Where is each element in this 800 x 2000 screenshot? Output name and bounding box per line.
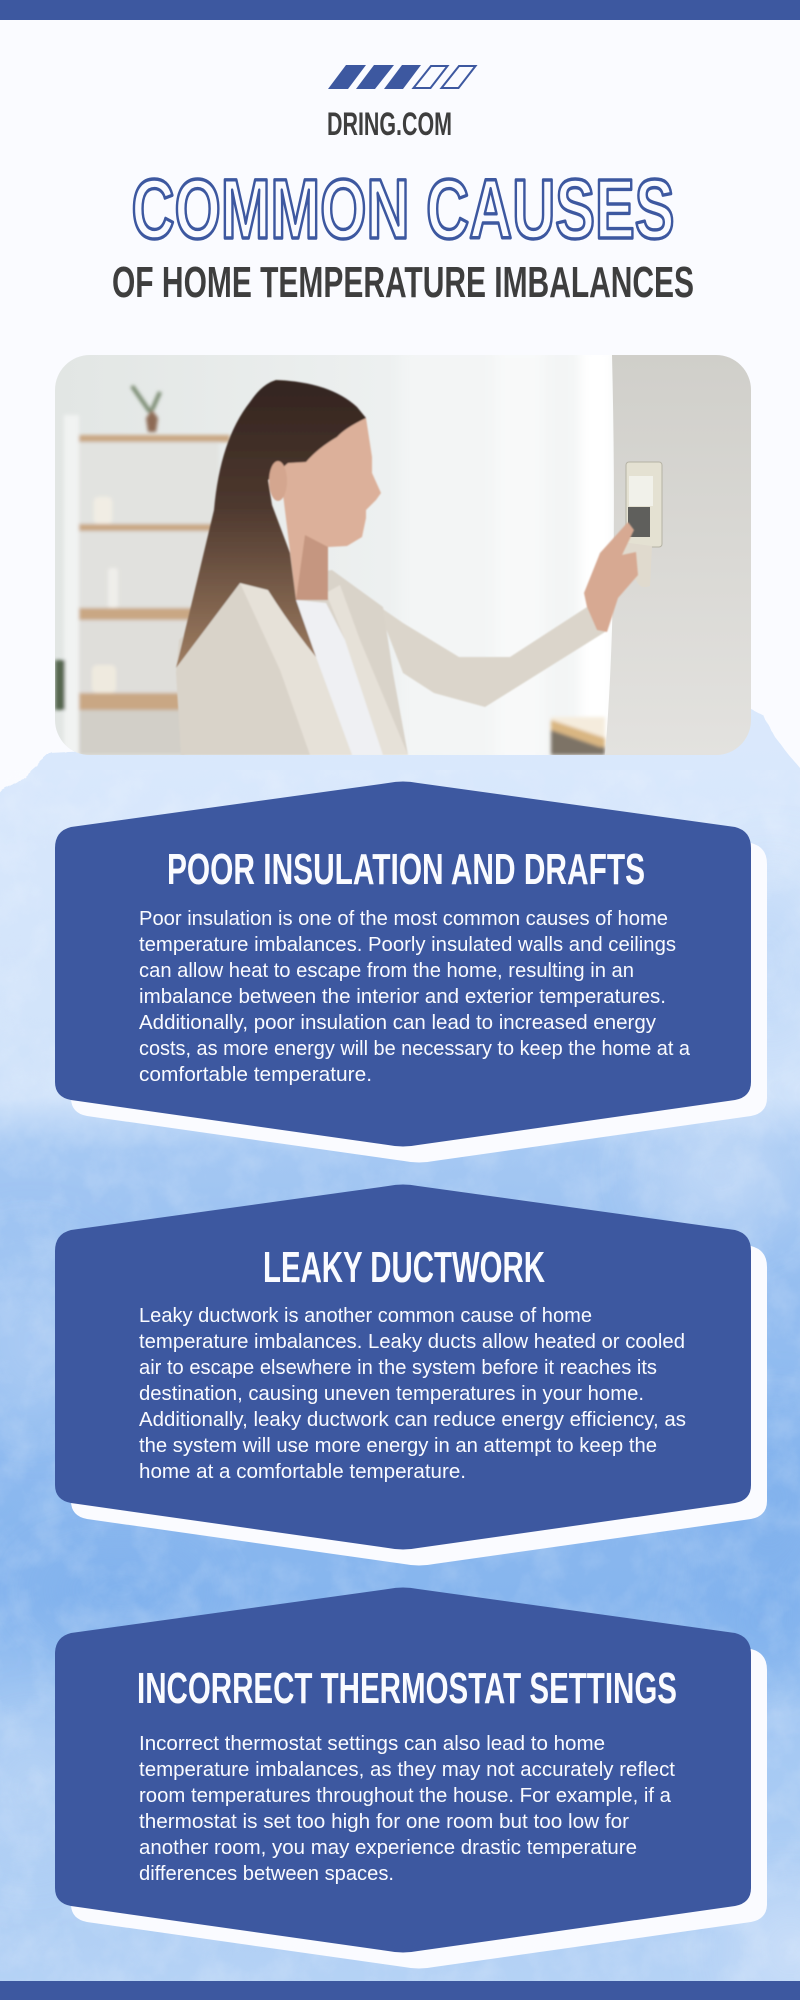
body text: [139, 1304, 686, 1483]
body text: home at a comfortable temperature.: [139, 1460, 466, 1483]
body text: another room, you may experience drastic temperature: [139, 1836, 637, 1859]
panel: leaky ductwork: [55, 1184, 767, 1566]
body text: can allow heat to escape from the home, resulting in an: [139, 959, 634, 982]
body text: costs, as more energy will be necessary to keep the home at a: [139, 1037, 691, 1060]
photo: woman adjusting thermostat: [55, 345, 751, 765]
body text: Additionally, leaky ductwork can reduce energy efficiency, as: [139, 1408, 686, 1431]
body text: Additionally, poor insulation can lead to increased energy: [139, 1011, 657, 1034]
body text: Poor insulation is one of the most common causes of home: [139, 907, 668, 930]
neck and face: [280, 418, 381, 600]
cardigan body: [176, 570, 408, 755]
logo text: DRING.COM: [327, 106, 452, 142]
body text: temperature imbalances. Poorly insulated walls and ceilings: [139, 933, 676, 956]
panel body: [55, 1588, 751, 1952]
thermostat: [626, 462, 662, 586]
body text: Leaky ductwork is another common cause of home: [139, 1304, 592, 1327]
panel: incorrect thermostat settings: [55, 1588, 767, 1968]
logo icon: slanted bars: [328, 65, 476, 89]
panel body: [55, 782, 751, 1146]
panel shadow: [71, 1604, 767, 1968]
lapel left: [240, 573, 352, 755]
heading: LEAKY DUCTWORK: [263, 1243, 545, 1292]
watercolor background: [0, 706, 800, 2000]
body text: destination, causing uneven temperatures in your home.: [139, 1382, 644, 1405]
top bar: [0, 0, 800, 20]
body text: Incorrect thermostat settings can also lead to home: [139, 1732, 605, 1755]
body text: [139, 907, 691, 1086]
hair: [176, 380, 366, 668]
bottom bar: [0, 1981, 800, 2000]
shirt: [296, 600, 383, 755]
body text: [139, 1732, 675, 1885]
panel body: [55, 1184, 751, 1550]
hand: [584, 522, 638, 632]
arm: [377, 605, 605, 707]
body text: differences between spaces.: [139, 1862, 394, 1885]
body text: temperature imbalances. Leaky ducts allow heated or cooled: [139, 1330, 685, 1353]
body text: comfortable temperature.: [139, 1063, 372, 1086]
body text: air to escape elsewhere in the system before it reaches its: [139, 1356, 657, 1379]
body text: room temperatures throughout the house. For example, if a: [139, 1784, 672, 1807]
panel shadow: [71, 798, 767, 1162]
panel shadow: [71, 1200, 767, 1566]
body text: temperature imbalances, as they may not accurately reflect: [139, 1758, 675, 1781]
body text: the system will use more energy in an attempt to keep the: [139, 1434, 657, 1457]
body text: imbalance between the interior and exterior temperatures.: [139, 985, 666, 1008]
ear: [269, 461, 287, 501]
lapel right: [326, 585, 408, 755]
body text: thermostat is set too high for one room but too low for: [139, 1810, 629, 1833]
neck shadow: [296, 535, 328, 600]
panel: poor insulation and drafts: [55, 782, 767, 1162]
